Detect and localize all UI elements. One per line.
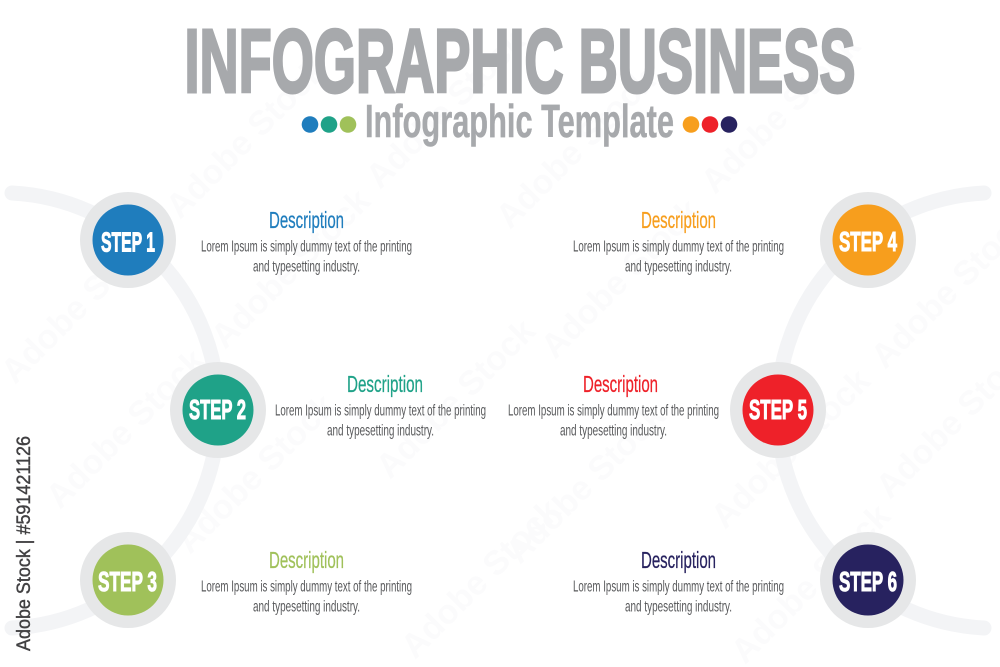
step 6 description <box>573 547 784 616</box>
step 2 description: Description <box>347 371 423 397</box>
step 1 description: Description <box>269 207 344 233</box>
step 1 badge: STEP 1 <box>101 226 155 258</box>
background watermark: Adobe Stock <box>724 497 898 667</box>
step 2 description: Lorem Ipsum is simply dummy text of the printing <box>275 402 486 420</box>
background watermark: Adobe Stock <box>704 362 878 536</box>
step 4 description: and typesetting industry. <box>625 258 732 276</box>
step 3 description: Description <box>269 547 344 573</box>
right connecting arc <box>778 193 984 628</box>
step 2 badge <box>170 362 266 458</box>
right decorative dots <box>683 116 737 133</box>
step 6 badge <box>820 532 916 628</box>
background watermark: Adobe Stock <box>534 192 708 366</box>
step 1 badge <box>80 192 176 288</box>
step 5 badge <box>730 362 826 458</box>
stock credit: Adobe Stock | #591421126 <box>14 436 35 651</box>
step 3 badge: STEP 3 <box>98 566 157 597</box>
step 3 description: and typesetting industry. <box>253 598 360 616</box>
step 6 description: Lorem Ipsum is simply dummy text of the printing <box>573 578 784 596</box>
step 2 description: and typesetting industry. <box>327 422 434 440</box>
background watermark: Adobe Stock <box>369 312 543 486</box>
step 1 description <box>201 207 412 276</box>
background watermark: Adobe Stock <box>39 342 213 516</box>
background watermark: Adobe Stock <box>169 387 343 561</box>
step 4 badge <box>820 192 916 288</box>
step 2 description <box>275 371 486 440</box>
step 4 description <box>573 207 784 276</box>
step 1 description: and typesetting industry. <box>253 258 360 276</box>
step 4 badge: STEP 4 <box>839 226 897 257</box>
step 5 description <box>508 371 719 440</box>
step 4 description: Description <box>641 207 716 233</box>
background watermark: Adobe Stock <box>499 397 673 571</box>
left decorative dots <box>302 116 356 133</box>
background watermark: Adobe Stock <box>359 22 533 196</box>
step 5 description: and typesetting industry. <box>560 422 667 440</box>
step 6 description: and typesetting industry. <box>625 598 732 616</box>
step 6 badge: STEP 6 <box>839 566 897 597</box>
background watermark: Adobe Stock <box>394 492 568 666</box>
step 3 description <box>201 547 412 616</box>
subtitle: Infographic Template <box>365 95 674 147</box>
step 5 badge: STEP 5 <box>749 394 807 425</box>
step 3 badge <box>80 532 176 628</box>
background watermark: Adobe Stock <box>489 62 663 236</box>
step 5 description: Description <box>583 371 658 397</box>
background watermark: Adobe Stock <box>694 27 868 201</box>
left connecting arc <box>12 193 218 628</box>
step 1 description: Lorem Ipsum is simply dummy text of the printing <box>201 238 412 256</box>
background watermark: Adobe Stock <box>204 182 378 356</box>
step 3 description: Lorem Ipsum is simply dummy text of the printing <box>201 578 412 596</box>
background watermark: Adobe Stock <box>159 52 333 226</box>
step 2 badge: STEP 2 <box>189 394 246 425</box>
step 4 description: Lorem Ipsum is simply dummy text of the printing <box>573 238 784 256</box>
step 5 description: Lorem Ipsum is simply dummy text of the printing <box>508 402 719 420</box>
step 6 description: Description <box>641 547 716 573</box>
